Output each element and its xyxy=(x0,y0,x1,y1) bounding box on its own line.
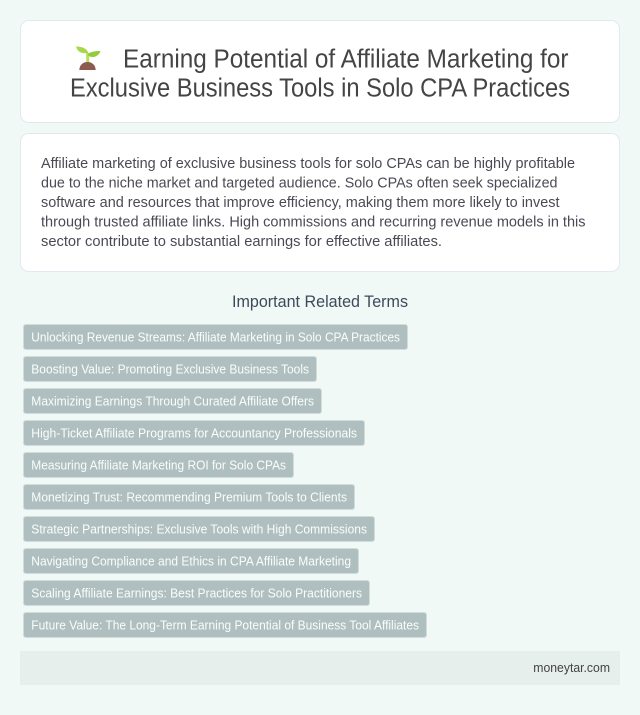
chip 10 xyxy=(24,612,426,638)
panel: description card xyxy=(20,134,620,272)
chip 1 xyxy=(24,324,408,350)
chip 7 xyxy=(24,516,374,542)
chip 9: Scaling Affiliate Earnings: Best Practices for Solo Practitioners xyxy=(31,586,362,600)
chip 10: Future Value: The Long-Term Earning Potential of Business Tool Affiliates xyxy=(31,618,419,632)
chip 5 xyxy=(24,452,294,478)
footer source text: moneytar.com xyxy=(533,661,610,675)
chip 4: High-Ticket Affiliate Programs for Accountancy Professionals xyxy=(31,426,357,440)
list of term chips xyxy=(24,324,426,638)
description text: through trusted affiliate links. High commissions and recurring revenue models in this xyxy=(41,214,586,230)
description text: sector contribute to substantial earnings for effective affiliates. xyxy=(41,234,442,250)
chip 6: Monetizing Trust: Recommending Premium Tools to Clients xyxy=(31,490,347,504)
chip 1: Unlocking Revenue Streams: Affiliate Marketing in Solo CPA Practices xyxy=(31,330,400,344)
chip 2 xyxy=(24,356,316,382)
heading: important related terms: Important Related Terms xyxy=(232,293,408,311)
chip 3: Maximizing Earnings Through Curated Affiliate Offers xyxy=(31,394,314,408)
title text: Exclusive Business Tools in Solo CPA Practices xyxy=(70,74,570,102)
chip 9 xyxy=(24,580,370,606)
footer bar xyxy=(20,651,620,685)
icon: sprout xyxy=(76,46,100,70)
chip 7: Strategic Partnerships: Exclusive Tools with High Commissions xyxy=(31,522,367,536)
chip 6 xyxy=(24,484,354,510)
title text: Earning Potential of Affiliate Marketing for xyxy=(123,46,569,74)
chip 8 xyxy=(24,548,358,574)
description text: Affiliate marketing of exclusive business tools for solo CPAs can be highly profitable xyxy=(41,156,575,172)
description text xyxy=(41,156,586,250)
chip 8: Navigating Compliance and Ethics in CPA Affiliate Marketing xyxy=(31,554,351,568)
chip 4 xyxy=(24,420,364,446)
chip 2: Boosting Value: Promoting Exclusive Business Tools xyxy=(31,362,309,376)
description text: due to the niche market and targeted audience. Solo CPAs often seek specialized xyxy=(41,176,558,192)
title text xyxy=(70,46,570,102)
description text: software and resources that improve efficiency, making them more likely to invest xyxy=(41,195,560,211)
chip 3 xyxy=(24,388,322,414)
chip 5: Measuring Affiliate Marketing ROI for Solo CPAs xyxy=(31,458,286,472)
panel: title card xyxy=(20,20,620,122)
